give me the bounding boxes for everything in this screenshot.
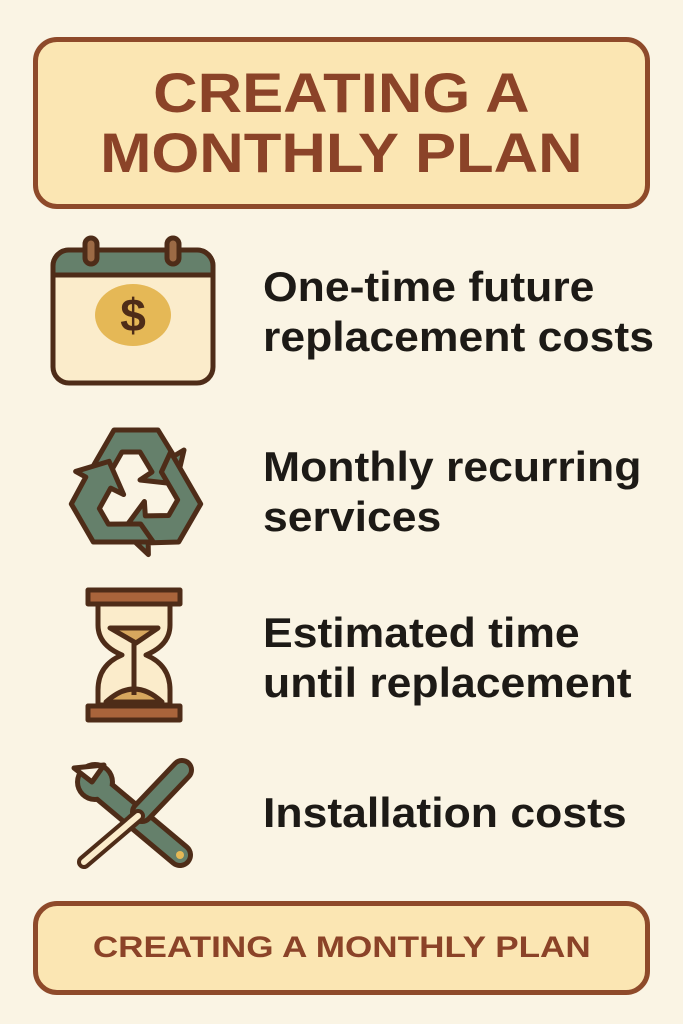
text: item 1: One-time future [263,263,594,310]
text: item 2: Monthly recurring [263,443,641,490]
text: item 3: until replacement [263,659,632,706]
text: item 2 [263,443,641,540]
footer banner [33,901,650,995]
text: item 2: services [263,493,441,540]
text: item 1: replacement costs [263,313,654,360]
icon: calendar: $ [120,289,146,341]
title [33,37,650,209]
text: item 3: Estimated time [263,609,580,656]
text: item 4: Installation costs [263,789,627,836]
text: item 1 [263,263,654,360]
title: MONTHLY PLAN [100,121,583,184]
footer banner: CREATING A MONTHLY PLAN [93,931,590,964]
text: item 3 [263,609,632,706]
title: CREATING A [153,61,530,124]
